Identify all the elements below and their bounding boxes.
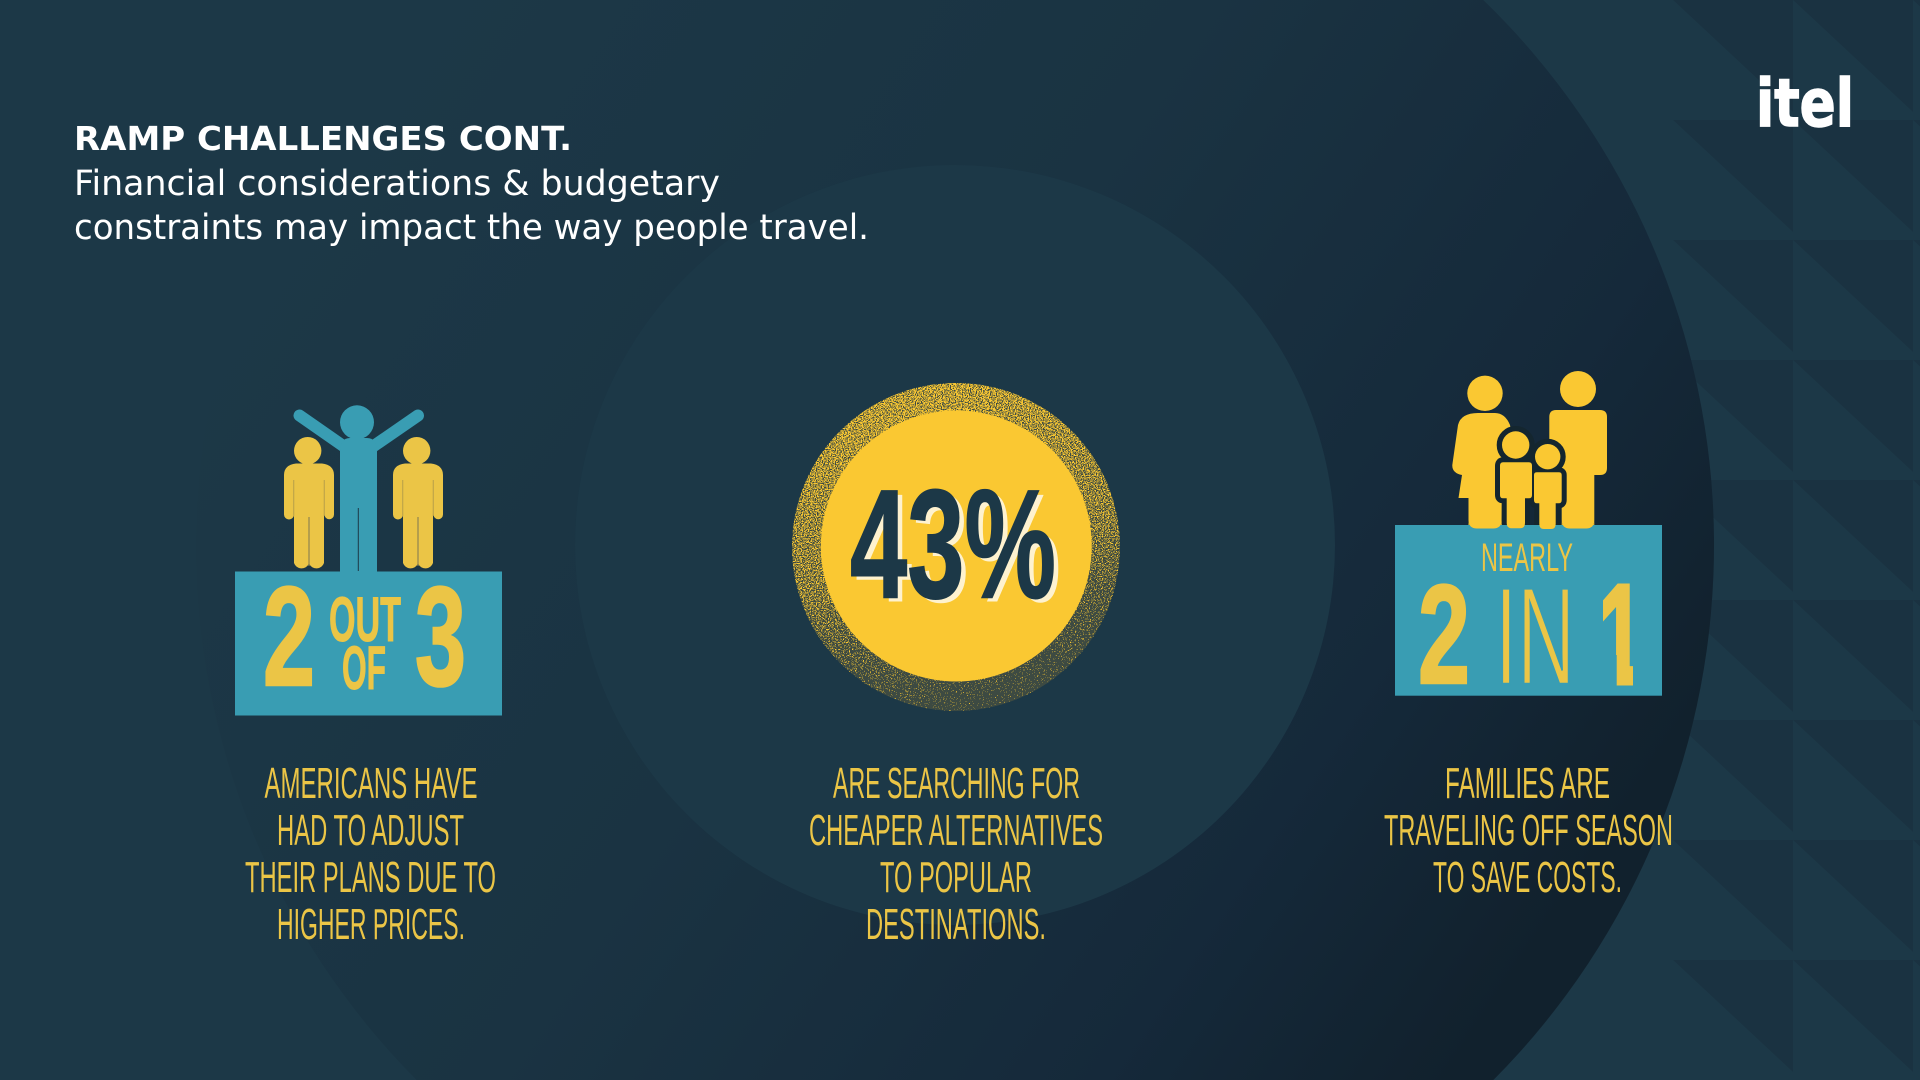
caption: DESTINATIONS. [866,900,1046,949]
icon: family feet and children [1468,431,1594,529]
stat: nearly: NEARLY [1481,536,1573,580]
icon: grainy ring [792,383,1120,711]
caption: TO SAVE COSTS. [1433,853,1622,902]
panel: 43% [792,383,1120,949]
caption: HIGHER PRICES. [277,900,465,949]
stat: 1: 1 [1599,555,1643,713]
heading [74,119,869,248]
caption [1384,759,1673,902]
icon: yellow person left [284,437,334,568]
caption: CHEAPER ALTERNATIVES [809,806,1103,855]
subtitle line 1: Financial considerations & budgetary [74,164,720,204]
stat box [1395,431,1662,714]
caption: AMERICANS HAVE [264,759,478,808]
logo: itel: itel [1756,65,1854,142]
stat: 1 [1588,555,1656,713]
stat: 2: 2 [1418,555,1470,713]
stat: 43%: 43% [855,462,1061,634]
icon: yellow person right [393,437,443,568]
stat: 43% [850,458,1061,634]
caption: THEIR PLANS DUE TO [245,853,496,902]
stat: 3: 3 [415,557,466,715]
caption: HAD TO ADJUST [277,806,464,855]
icon: yellow disc [821,410,1092,682]
title: RAMP CHALLENGES CONT. [74,119,572,158]
stat: out: OUT [329,585,401,655]
panel: nearly 2 in 1 [1384,371,1673,902]
stat box [235,557,502,716]
icon: family [1452,371,1607,528]
stat: 43%: 43% [850,458,1056,630]
caption [245,759,496,949]
stat: in: IN [1495,559,1575,714]
stat: of: OF [342,634,386,702]
stat: 2: 2 [263,557,315,715]
inner circle [575,165,1335,925]
icon: teal person arms raised [300,405,418,572]
caption: TRAVELING OFF SEASON [1384,806,1673,855]
outer circle [196,0,1714,1080]
caption: FAMILIES ARE [1445,759,1610,808]
panel: 2 out of 3 [235,405,502,949]
caption: ARE SEARCHING FOR [833,759,1080,808]
subtitle line 2: constraints may impact the way people travel. [74,208,869,248]
caption [809,759,1103,949]
caption: TO POPULAR [880,853,1032,902]
